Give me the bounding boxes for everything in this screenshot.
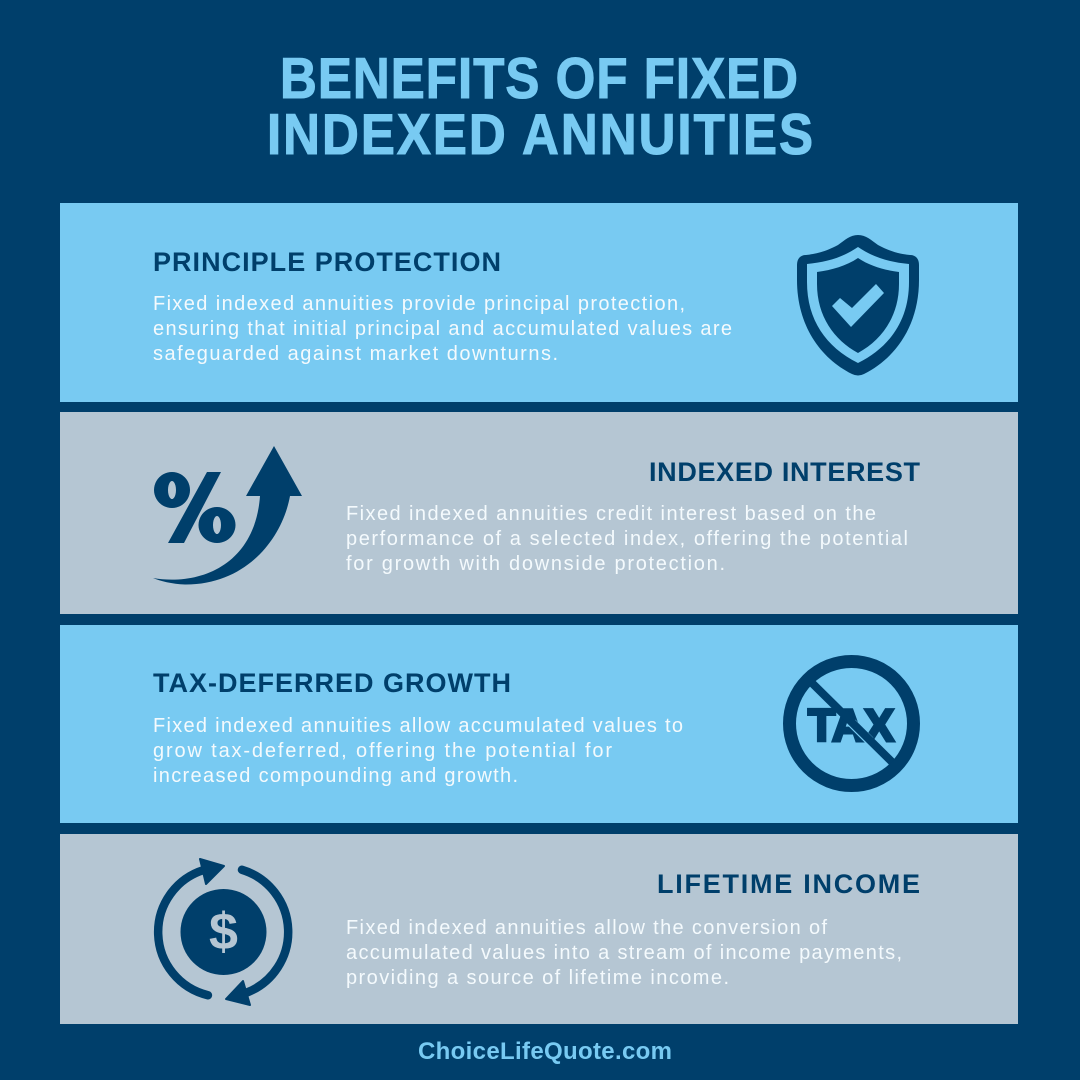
icon: percent with rising arrow — [153, 446, 302, 585]
icon: dollar coin with circular arrows: $ — [209, 903, 238, 961]
text block: principle protection — [153, 293, 732, 365]
icon: no tax symbol: TAX — [808, 700, 894, 751]
heading: indexed interest: INDEXED INTEREST — [649, 457, 920, 487]
panel: principle protection — [60, 203, 1018, 402]
text block: indexed interest: for growth with downside protection. — [346, 553, 725, 575]
title — [267, 47, 813, 167]
icon: dollar coin with circular arrows — [158, 859, 288, 1005]
footer: website: ChoiceLifeQuote.com — [418, 1038, 672, 1065]
text block: principle protection: safeguarded against market downturns. — [153, 343, 558, 365]
title: INDEXED ANNUITIES — [267, 103, 813, 167]
text block: indexed interest — [346, 503, 908, 575]
heading: lifetime income: LIFETIME INCOME — [657, 869, 920, 899]
heading: tax-deferred growth: TAX-DEFERRED GROWTH — [153, 668, 511, 698]
text block: lifetime income: Fixed indexed annuities allow the conversion of — [346, 917, 827, 939]
text block: lifetime income: providing a source of lifetime income. — [346, 967, 729, 989]
text block: tax-deferred growth: increased compounding and growth. — [153, 765, 518, 787]
title: BENEFITS OF FIXED — [280, 47, 798, 111]
text block: tax-deferred growth: Fixed indexed annuities allow accumulated values to — [153, 715, 683, 737]
icon: no tax symbol — [790, 662, 914, 786]
text block: principle protection: Fixed indexed annuities provide principal protection, — [153, 293, 685, 315]
panel: lifetime income — [60, 834, 1018, 1024]
panel: indexed interest — [60, 412, 1018, 614]
text block: lifetime income: accumulated values into a stream of income payments, — [346, 942, 902, 964]
text block: tax-deferred growth: grow tax-deferred, offering the potential for — [153, 740, 612, 762]
panel: tax-deferred growth — [60, 625, 1018, 823]
icon: shield with check mark — [797, 235, 919, 376]
heading: principle protection: PRINCIPLE PROTECTION — [153, 247, 501, 277]
text block: principle protection: ensuring that initial principal and accumulated values are — [153, 318, 732, 340]
text block: tax-deferred growth — [153, 715, 683, 787]
text block: indexed interest: Fixed indexed annuities credit interest based on the — [346, 503, 876, 525]
text block: lifetime income — [346, 917, 902, 989]
text block: indexed interest: performance of a selected index, offering the potential — [346, 528, 908, 550]
